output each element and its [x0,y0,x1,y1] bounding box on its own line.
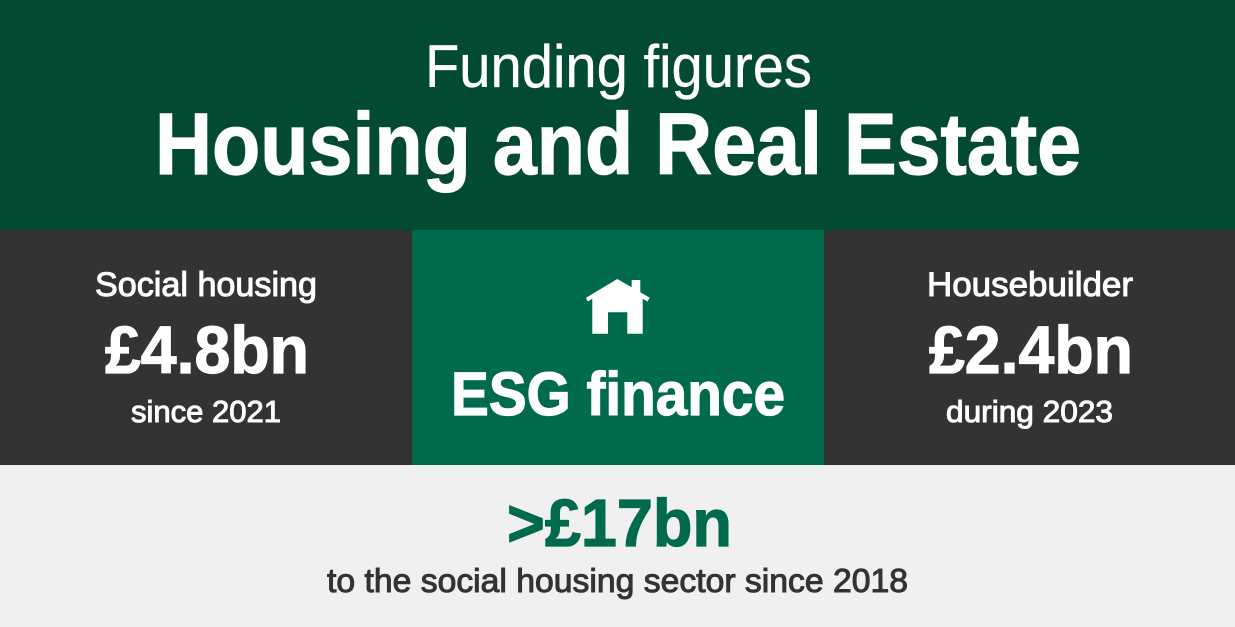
figure: 2.4bn: £2.4bn [929,313,1133,388]
panel: housebuilder [824,230,1235,465]
panel: social housing [0,230,412,465]
title: Housing and Real Estate: Housing and Real Estate [155,96,1081,193]
panel: header [0,0,1235,230]
figure: 4.8bn: £4.8bn [105,313,309,388]
figure: over 17bn: >£17bn [507,486,732,561]
heading: ESG finance: ESG finance [451,360,785,428]
panel: ESG finance [412,230,824,465]
title: Funding figures: Funding figures [425,33,812,100]
caption: social housing sector: to the social housing sector since 2018 [327,562,908,599]
panel: total [0,465,1235,627]
label: Housebuilder: Housebuilder [927,266,1133,304]
icon: house [586,279,650,334]
caption: during 2023: during 2023 [946,394,1113,429]
label: Social housing: Social housing [95,266,317,304]
caption: since 2021: since 2021 [131,394,281,429]
